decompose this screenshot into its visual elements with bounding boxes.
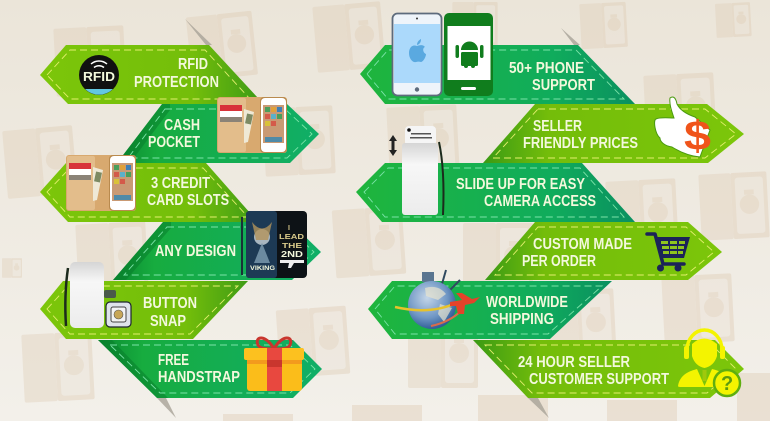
- panel: RFID protection: [40, 45, 258, 104]
- panel: cash pocket: [117, 97, 319, 163]
- panel: seller friendly prices: [483, 97, 744, 163]
- panel: worldwide shipping: [368, 270, 612, 339]
- label: [158, 352, 240, 386]
- icon: Android phone: [444, 13, 493, 96]
- label: 24 HOUR SELLER: [518, 354, 630, 371]
- label: [148, 117, 200, 151]
- label: WORLDWIDE: [486, 294, 568, 311]
- icon: globe with plane: [395, 270, 480, 329]
- label: SLIDE UP FOR EASY: [456, 176, 586, 193]
- panel: custom made per order: [485, 222, 722, 280]
- label: [134, 56, 219, 91]
- label: SHIPPING: [490, 311, 554, 328]
- icon: iPhone: [392, 14, 442, 96]
- icon: thumbs up with dollar: [655, 97, 711, 159]
- label: [486, 294, 568, 328]
- icon: Viking design wallet: I: [288, 225, 290, 232]
- icon: Viking design wallet: THE: [282, 243, 302, 250]
- label: POCKET: [148, 134, 200, 151]
- label: HANDSTRAP: [158, 369, 240, 386]
- label: SNAP: [150, 313, 186, 330]
- icon: open wallet: [217, 97, 287, 153]
- label: [147, 175, 229, 209]
- icon: RFID badge: RFID: [83, 69, 115, 84]
- icon: gift box: [244, 338, 304, 391]
- label: ANY DESIGN: [155, 243, 236, 260]
- icon: up-down arrow: [389, 135, 397, 156]
- icon: support agent: [678, 330, 740, 396]
- fold shadow tails: [157, 19, 580, 418]
- icon: shopping cart: [647, 234, 690, 272]
- icon: Viking design wallet: [241, 211, 307, 278]
- icon: snap button: [106, 302, 131, 327]
- label: SELLER: [533, 118, 582, 135]
- panel: button snap: [40, 262, 248, 339]
- label: CARD SLOTS: [147, 192, 229, 209]
- label: FREE: [158, 352, 189, 369]
- icon: thumbs up with dollar: $: [684, 112, 711, 159]
- icon: slide-up wallet: [402, 126, 444, 215]
- label: RFID: [178, 56, 208, 73]
- icon: Viking design wallet: VIKING: [250, 265, 275, 272]
- label: SUPPORT: [532, 77, 595, 94]
- label: FRIENDLY PRICES: [523, 135, 638, 152]
- label: CAMERA ACCESS: [484, 193, 596, 210]
- icon: support agent: ?: [721, 373, 733, 395]
- panel: 24 hour seller customer support: [473, 330, 744, 398]
- label: [509, 60, 595, 94]
- icon: white wallet with strap: [65, 262, 116, 328]
- panel: 3 credit card slots: [40, 155, 258, 222]
- label: [143, 295, 197, 330]
- panel: slide up for easy camera access: [356, 126, 635, 222]
- icon: open wallet: [66, 155, 136, 211]
- label: PROTECTION: [134, 74, 219, 91]
- label: 3 CREDIT: [151, 175, 210, 192]
- label: 50+ PHONE: [509, 60, 584, 77]
- label: [522, 236, 632, 270]
- label: [523, 118, 638, 152]
- label: BUTTON: [143, 295, 197, 312]
- label: [518, 354, 669, 388]
- panel: 50+ phone support: [360, 13, 635, 104]
- panel: any design: [113, 211, 321, 280]
- label: CUSTOM MADE: [533, 236, 632, 253]
- icon: Viking design wallet: LEAD: [279, 234, 304, 241]
- label: CUSTOMER SUPPORT: [529, 371, 669, 388]
- label: PER ORDER: [522, 253, 596, 270]
- panel: free handstrap: [98, 338, 322, 398]
- label: [456, 176, 596, 210]
- label: CASH: [164, 117, 200, 134]
- icon: RFID badge: [79, 55, 119, 95]
- icon: Viking design wallet: 2ND: [281, 250, 303, 259]
